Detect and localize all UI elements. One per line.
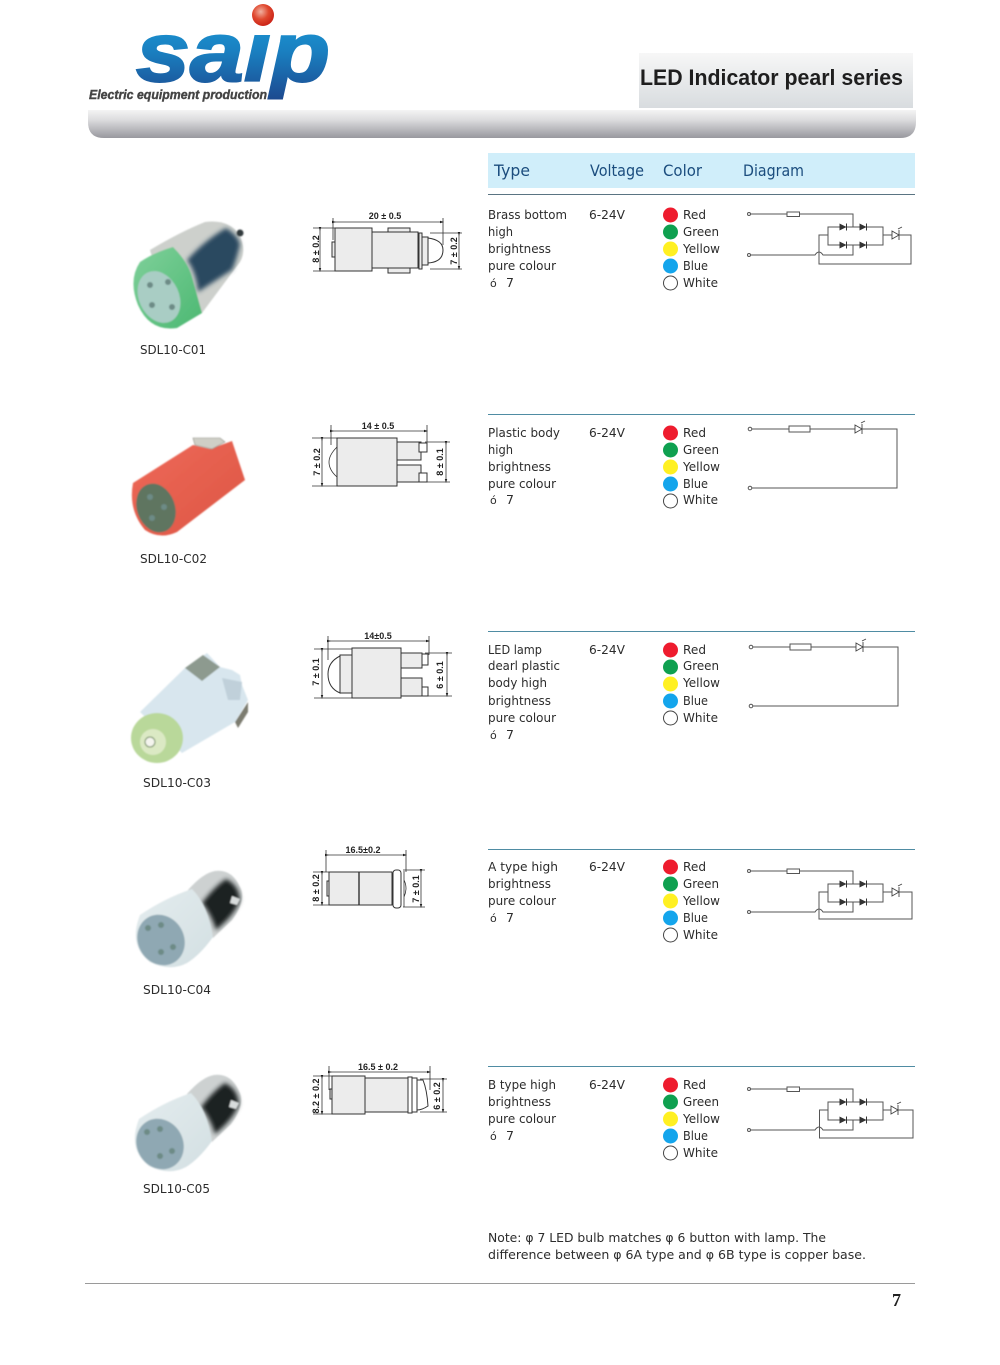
dimension drawing: C05: 16.5 ± 0.2 (358, 1062, 398, 1072)
note: Note: φ 7 LED bulb matches φ 6 button with lamp. The (488, 1230, 826, 1245)
dimension drawing: C05 (311, 1062, 447, 1114)
product label: SDL10-C05: SDL10-C05 (143, 1181, 210, 1196)
row 5: type: B type high (488, 1077, 556, 1092)
dimension drawing: C01: 7 ± 0.2 (449, 237, 459, 265)
row 1: type: pure colour (488, 258, 557, 273)
row 4: type: ó (490, 912, 497, 925)
row 2: colors: Green (683, 442, 719, 457)
logo tagline: Electric equipment production (89, 87, 267, 102)
row 1: type (488, 207, 567, 290)
row 5: type: brightness (488, 1094, 551, 1109)
table header (488, 153, 915, 188)
logo wordmark: saip (136, 5, 330, 99)
row 4: colors (663, 859, 720, 942)
row 5: type: pure colour (488, 1111, 557, 1126)
row 3: type: ó (490, 729, 497, 742)
product photo: SDL10-C01 (129, 222, 244, 330)
dimension drawing: C04 (311, 845, 425, 908)
row 3: colors: Yellow (682, 675, 720, 690)
row 1: circuit diagram (748, 212, 911, 264)
product photo: SDL10-C02 (130, 438, 245, 538)
dimension drawing: C02: 7 ± 0.2 (312, 448, 322, 476)
row 4: colors: Green (683, 876, 719, 891)
row 2: voltage: 6-24V (589, 425, 625, 440)
row 1: voltage: 6-24V (589, 207, 625, 222)
row 4: type: pure colour (488, 893, 557, 908)
dimension drawing: C03: 6 ± 0.1 (435, 661, 445, 689)
row 2: type: high (488, 442, 513, 457)
row 1: colors: Yellow (682, 241, 720, 256)
row 5: colors: Yellow (682, 1111, 720, 1126)
row 2: type: brightness (488, 459, 551, 474)
row 1: colors: Green (683, 224, 719, 239)
header: color: Color (663, 161, 702, 180)
row 4: colors: Blue (683, 910, 708, 925)
row 3: type (488, 642, 560, 742)
row 5: colors: Blue (683, 1128, 708, 1143)
row 5: colors: Green (683, 1094, 719, 1109)
row 2: type: Plastic body (488, 425, 561, 440)
row 4: type (488, 859, 558, 925)
dimension drawing: C02: 8 ± 0.1 (435, 448, 445, 476)
row 4: type: brightness (488, 876, 551, 891)
row 2: colors: White (683, 492, 718, 507)
row 5: type (488, 1077, 557, 1143)
row 4: type: A type high (488, 859, 558, 874)
row 2: type: 7 (506, 492, 514, 507)
dimension drawing: C03: 7 ± 0.1 (311, 658, 321, 686)
row 4: colors: Yellow (682, 893, 720, 908)
row 2: colors: Yellow (682, 459, 720, 474)
row 5: colors (663, 1077, 720, 1160)
row 1: type: ó (490, 277, 497, 290)
row 1: colors: White (683, 275, 718, 290)
header bar (88, 110, 916, 138)
row 3: type: dearl plastic (488, 658, 560, 673)
product photo: SDL10-C05 (127, 1075, 241, 1178)
row 3: colors (663, 642, 720, 725)
dimension drawing: C03 (311, 631, 452, 698)
row 2: type: pure colour (488, 476, 557, 491)
row 3: type: brightness (488, 693, 551, 708)
row 2: colors (663, 425, 720, 508)
row 1: type: Brass bottom (488, 207, 567, 222)
product label: SDL10-C01: SDL10-C01 (140, 342, 206, 357)
row 4: type: 7 (506, 910, 514, 925)
page number: 7 (892, 1290, 901, 1310)
row 5: circuit diagram (748, 1087, 913, 1138)
row 3: circuit diagram (749, 639, 898, 708)
logo: saip (89, 4, 330, 102)
header: voltage: Voltage (590, 161, 644, 180)
dimension drawing: C01: 20 ± 0.5 (369, 211, 401, 221)
row 1: type: high (488, 224, 513, 239)
row 2: colors: Red (683, 425, 706, 440)
row 1: colors: Blue (683, 258, 708, 273)
row 4: circuit diagram (748, 869, 912, 919)
dimension drawing: C05: 8.2 ± 0.2 (311, 1079, 321, 1113)
row 5: colors: Red (683, 1077, 706, 1092)
product photo: SDL10-C04 (128, 871, 242, 974)
dimension drawing: C04: 7 ± 0.1 (411, 875, 421, 903)
row 5: colors: White (683, 1145, 718, 1160)
dimension drawing: C01 (311, 211, 462, 273)
title panel (639, 53, 913, 108)
title: LED Indicator pearl series (640, 65, 903, 90)
row 4: voltage: 6-24V (589, 859, 625, 874)
row 3: type: LED lamp (488, 642, 542, 657)
product photo: SDL10-C03 (131, 653, 248, 763)
row 4: colors: White (683, 927, 718, 942)
row 1: type: brightness (488, 241, 551, 256)
dimension drawing: C02 (312, 421, 450, 486)
row 5: type: 7 (506, 1128, 514, 1143)
row 3: colors: White (683, 710, 718, 725)
dimension drawing: C04: 8 ± 0.2 (311, 874, 321, 902)
product label: SDL10-C04: SDL10-C04 (143, 982, 211, 997)
dimension drawing: C01: 8 ± 0.2 (311, 235, 321, 263)
dimension drawing: C03: 14±0.5 (364, 631, 392, 641)
row 3: colors: Blue (683, 693, 708, 708)
note: difference between φ 6A type and φ 6B type is copper base. (488, 1247, 866, 1262)
product label: SDL10-C02: SDL10-C02 (140, 551, 207, 566)
row 5: type: ó (490, 1130, 497, 1143)
row 3: colors: Green (683, 658, 719, 673)
row 5: voltage: 6-24V (589, 1077, 625, 1092)
row 1: colors: Red (683, 207, 706, 222)
header: type: Type (493, 161, 530, 180)
row 1: colors (663, 207, 720, 290)
logo red ball (252, 4, 274, 26)
dimension drawing: C04: 16.5±0.2 (346, 845, 380, 855)
row 3: type: body high (488, 675, 547, 690)
row 2: circuit diagram (748, 421, 897, 490)
row 3: type: pure colour (488, 710, 557, 725)
product label: SDL10-C03: SDL10-C03 (143, 775, 211, 790)
dimension drawing: C02: 14 ± 0.5 (362, 421, 394, 431)
row 2: type: ó (490, 494, 497, 507)
row 3: type: 7 (506, 727, 514, 742)
row 3: voltage: 6-24V (589, 642, 625, 657)
dimension drawing: C05: 6 ± 0.2 (432, 1082, 442, 1110)
row 3: colors: Red (683, 642, 706, 657)
header: diagram: Diagram (743, 161, 804, 180)
row 2: type (488, 425, 561, 507)
row 2: colors: Blue (683, 476, 708, 491)
row 1: type: 7 (506, 275, 514, 290)
row 4: colors: Red (683, 859, 706, 874)
note (488, 1230, 866, 1262)
